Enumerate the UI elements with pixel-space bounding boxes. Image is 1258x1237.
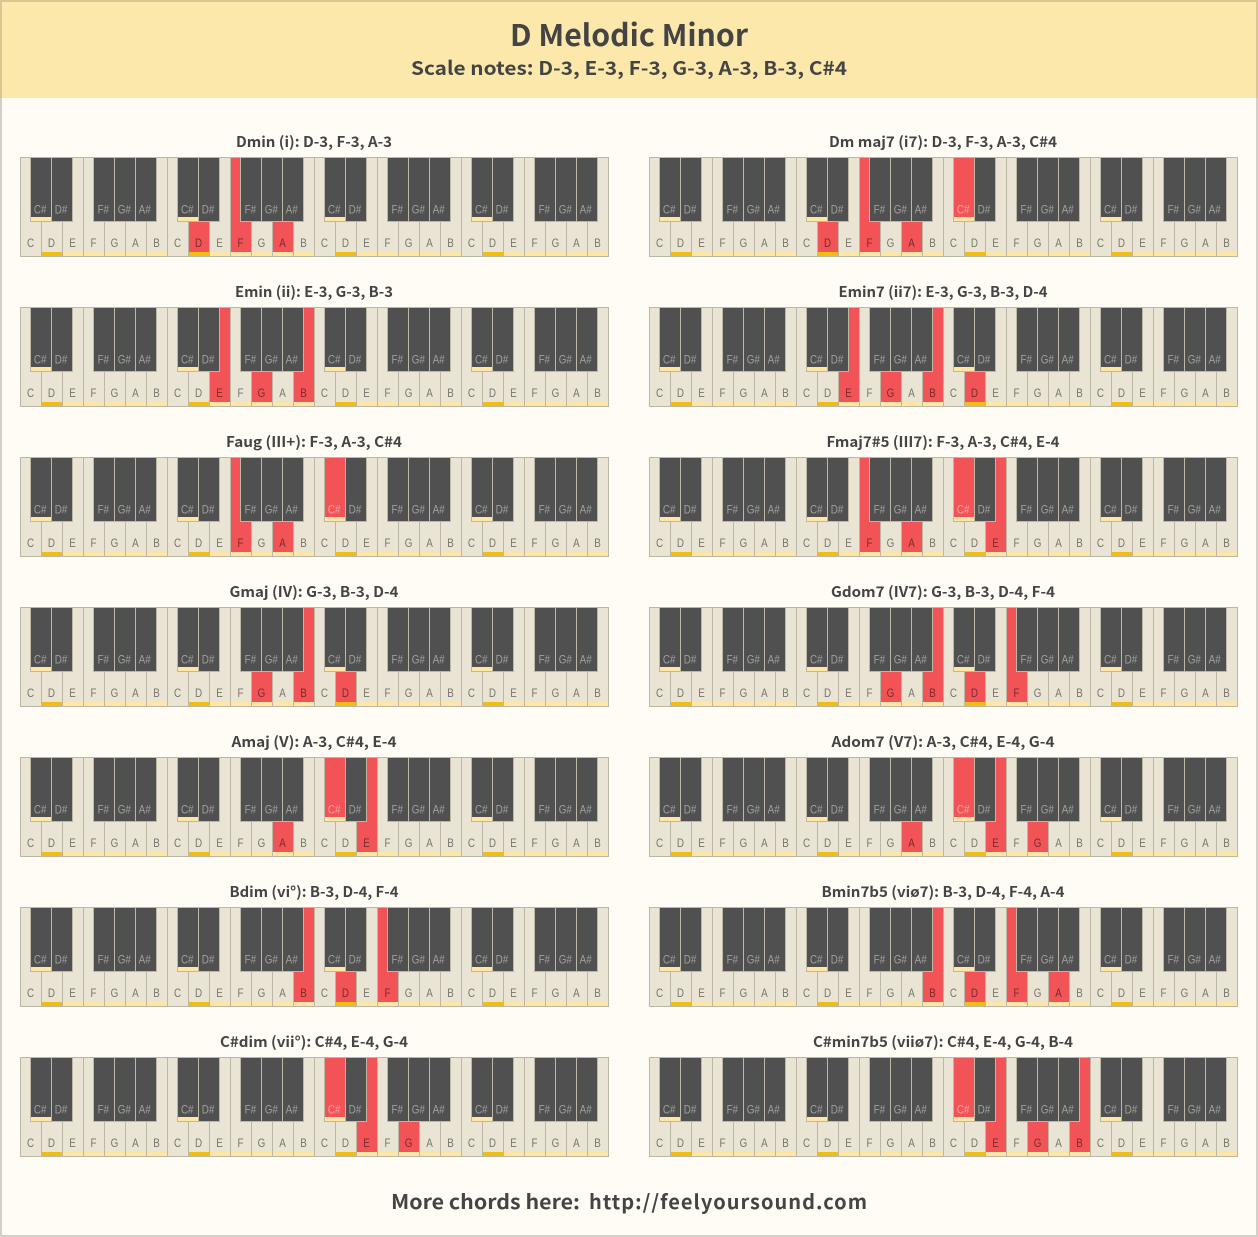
title: D Melodic Minor — [510, 11, 749, 55]
chord: Adom7 — [650, 731, 1238, 856]
keyboard — [650, 158, 1238, 256]
keyboard: CDEFGABCDEFGABCDEFGABCDEFGAB — [656, 537, 1230, 550]
chord: Emin7 — [650, 281, 1238, 406]
keyboard: C#D#F#G#A#C#D#F#G#A#C#D#F#G#A#C#D#F#G#A# — [34, 1104, 592, 1117]
keyboard: CDEFGABCDEFGABCDEFGABCDEFGAB — [27, 837, 601, 850]
keyboard — [20, 758, 608, 856]
keyboard — [650, 308, 1238, 406]
keyboard: CDEFGABCDEFGABCDEFGABCDEFGAB — [27, 1137, 601, 1150]
keyboard: C#D#F#G#A#C#D#F#G#A#C#D#F#G#A#C#D#F#G#A# — [34, 204, 592, 217]
chord title: Emin7 (ii7): E-3, G-3, B-3, D-4 — [838, 281, 1048, 302]
keyboard: C#D#F#G#A#C#D#F#G#A#C#D#F#G#A#C#D#F#G#A# — [663, 354, 1221, 367]
keyboard: C#D#F#G#A#C#D#F#G#A#C#D#F#G#A#C#D#F#G#A# — [663, 204, 1221, 217]
keyboard — [650, 458, 1238, 556]
chord title: Dmin (i): D-3, F-3, A-3 — [236, 131, 392, 152]
keyboard: CDEFGABCDEFGABCDEFGABCDEFGAB — [656, 837, 1230, 850]
chord title: Adom7 (V7): A-3, C#4, E-4, G-4 — [830, 731, 1055, 752]
keyboard: C#D#F#G#A#C#D#F#G#A#C#D#F#G#A#C#D#F#G#A# — [663, 1104, 1221, 1117]
keyboard — [20, 908, 608, 1006]
chord: C#min7b5 — [650, 1031, 1238, 1156]
chord title: Bmin7b5 (viø7): B-3, D-4, F-4, A-4 — [822, 881, 1065, 902]
keyboard: CDEFGABCDEFGABCDEFGABCDEFGAB — [27, 987, 601, 1000]
keyboard: CDEFGABCDEFGABCDEFGABCDEFGAB — [656, 987, 1230, 1000]
keyboard — [20, 608, 608, 706]
chord: C#dim — [20, 1031, 608, 1156]
keyboard: CDEFGABCDEFGABCDEFGABCDEFGAB — [27, 387, 601, 400]
keyboard — [650, 908, 1238, 1006]
chord title: Gdom7 (IV7): G-3, B-3, D-4, F-4 — [831, 581, 1055, 602]
keyboard: C#D#F#G#A#C#D#F#G#A#C#D#F#G#A#C#D#F#G#A# — [34, 954, 592, 967]
keyboard — [650, 758, 1238, 856]
keyboard: CDEFGABCDEFGABCDEFGABCDEFGAB — [27, 537, 601, 550]
keyboard: CDEFGABCDEFGABCDEFGABCDEFGAB — [27, 687, 601, 700]
keyboard: C#D#F#G#A#C#D#F#G#A#C#D#F#G#A#C#D#F#G#A# — [34, 804, 592, 817]
keyboard: CDEFGABCDEFGABCDEFGABCDEFGAB — [656, 387, 1230, 400]
chord: Fmaj7#5 — [650, 431, 1238, 556]
keyboard: CDEFGABCDEFGABCDEFGABCDEFGAB — [656, 237, 1230, 250]
footer link text: http://feelyoursound.com — [589, 1186, 867, 1215]
keyboard — [650, 1058, 1238, 1156]
chord: Faug — [20, 431, 608, 556]
chord title: Faug (III+): F-3, A-3, C#4 — [226, 431, 402, 452]
keyboard: C#D#F#G#A#C#D#F#G#A#C#D#F#G#A#C#D#F#G#A# — [34, 354, 592, 367]
chord: Gmaj — [20, 581, 608, 706]
chord title: Bdim (vi°): B-3, D-4, F-4 — [230, 881, 399, 902]
footer link text — [391, 1186, 867, 1215]
chord: Dmin — [20, 131, 608, 256]
keyboard: C#D#F#G#A#C#D#F#G#A#C#D#F#G#A#C#D#F#G#A# — [663, 504, 1221, 517]
keyboard: CDEFGABCDEFGABCDEFGABCDEFGAB — [656, 1137, 1230, 1150]
keyboard — [20, 458, 608, 556]
chord: Gdom7 — [650, 581, 1238, 706]
keyboard: C#D#F#G#A#C#D#F#G#A#C#D#F#G#A#C#D#F#G#A# — [34, 504, 592, 517]
keyboard: C#D#F#G#A#C#D#F#G#A#C#D#F#G#A#C#D#F#G#A# — [34, 654, 592, 667]
header band — [0, 0, 1258, 98]
chord: Bdim — [20, 881, 608, 1006]
keyboard: C#D#F#G#A#C#D#F#G#A#C#D#F#G#A#C#D#F#G#A# — [663, 954, 1221, 967]
chord: Dm maj7 — [650, 131, 1238, 256]
header fill — [2, 2, 1256, 98]
footer link text: More chords here: — [391, 1186, 580, 1215]
keyboard — [650, 608, 1238, 706]
keyboard: CDEFGABCDEFGABCDEFGABCDEFGAB — [656, 687, 1230, 700]
chord title: Emin (ii): E-3, G-3, B-3 — [235, 281, 393, 302]
keyboard: C#D#F#G#A#C#D#F#G#A#C#D#F#G#A#C#D#F#G#A# — [663, 654, 1221, 667]
keyboard: CDEFGABCDEFGABCDEFGABCDEFGAB — [27, 237, 601, 250]
chord title: Gmaj (IV): G-3, B-3, D-4 — [230, 581, 399, 602]
keyboard — [20, 308, 608, 406]
chord title: Amaj (V): A-3, C#4, E-4 — [230, 731, 397, 752]
keyboard — [20, 1058, 608, 1156]
chord title: C#min7b5 (viiø7): C#4, E-4, G-4, B-4 — [813, 1031, 1073, 1052]
chord: Emin — [20, 281, 608, 406]
keyboard — [20, 158, 608, 256]
chord title: C#dim (vii°): C#4, E-4, G-4 — [220, 1031, 408, 1052]
keyboard: C#D#F#G#A#C#D#F#G#A#C#D#F#G#A#C#D#F#G#A# — [663, 804, 1221, 817]
chord title: Fmaj7#5 (III7): F-3, A-3, C#4, E-4 — [826, 431, 1060, 452]
chord title: Dm maj7 (i7): D-3, F-3, A-3, C#4 — [829, 131, 1057, 152]
chord: Bmin7b5 — [650, 881, 1238, 1006]
scale notes subtitle: Scale notes: D-3, E-3, F-3, G-3, A-3, B-3, C#4 — [411, 54, 847, 81]
chord: Amaj — [20, 731, 608, 856]
